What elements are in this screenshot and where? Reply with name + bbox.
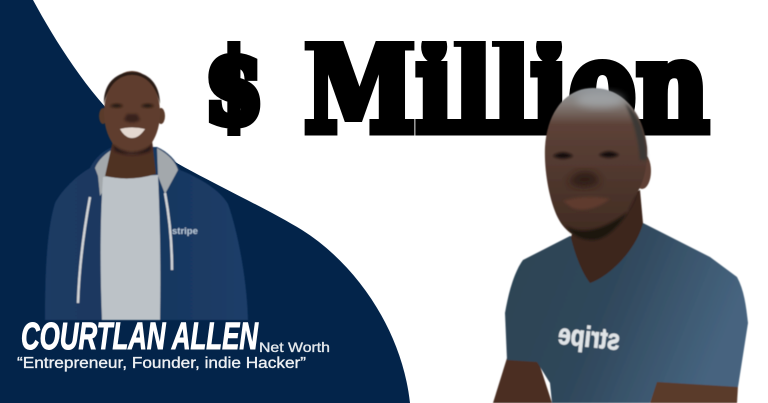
- hoodie: [45, 147, 248, 320]
- background: navy curved panel: [0, 0, 410, 403]
- hair shadow at side of head: [625, 103, 647, 160]
- tagline: “Entrepreneur, Founder, indie Hacker”: [17, 355, 306, 372]
- nose shadow: [568, 172, 600, 187]
- ear: [633, 153, 651, 189]
- photo: Courtlan Allen in hoodie: [45, 71, 248, 320]
- label: Net Worth: Net Worth: [259, 339, 330, 355]
- ears: [99, 108, 107, 124]
- title: $ Million: [208, 41, 710, 136]
- eyes: [110, 104, 154, 108]
- name: Courtlan Allen: COURTLAN ALLEN: [21, 316, 259, 358]
- dollar sign: $: [205, 26, 263, 146]
- logo on t-shirt, mirrored: stripe: [557, 319, 622, 357]
- hood lining: [95, 148, 178, 196]
- nose: [124, 114, 140, 122]
- word: Million: Million: [304, 13, 709, 161]
- beard: [113, 145, 152, 154]
- smile: [120, 128, 145, 138]
- hair: [104, 72, 160, 104]
- t-shirt body: [505, 223, 748, 403]
- mouth: [563, 197, 610, 210]
- neck: [105, 140, 156, 179]
- logo on hoodie: stripe: [172, 226, 198, 237]
- skull highlight: [576, 92, 624, 108]
- head: [104, 71, 160, 155]
- head: [545, 88, 647, 240]
- drawstrings: [78, 197, 90, 303]
- neck: [571, 190, 643, 283]
- photo: Courtlan Allen in t-shirt: [493, 88, 748, 403]
- t-shirt: [101, 175, 160, 320]
- beard: [566, 193, 637, 240]
- arms: [493, 358, 552, 403]
- eyes: [553, 152, 619, 158]
